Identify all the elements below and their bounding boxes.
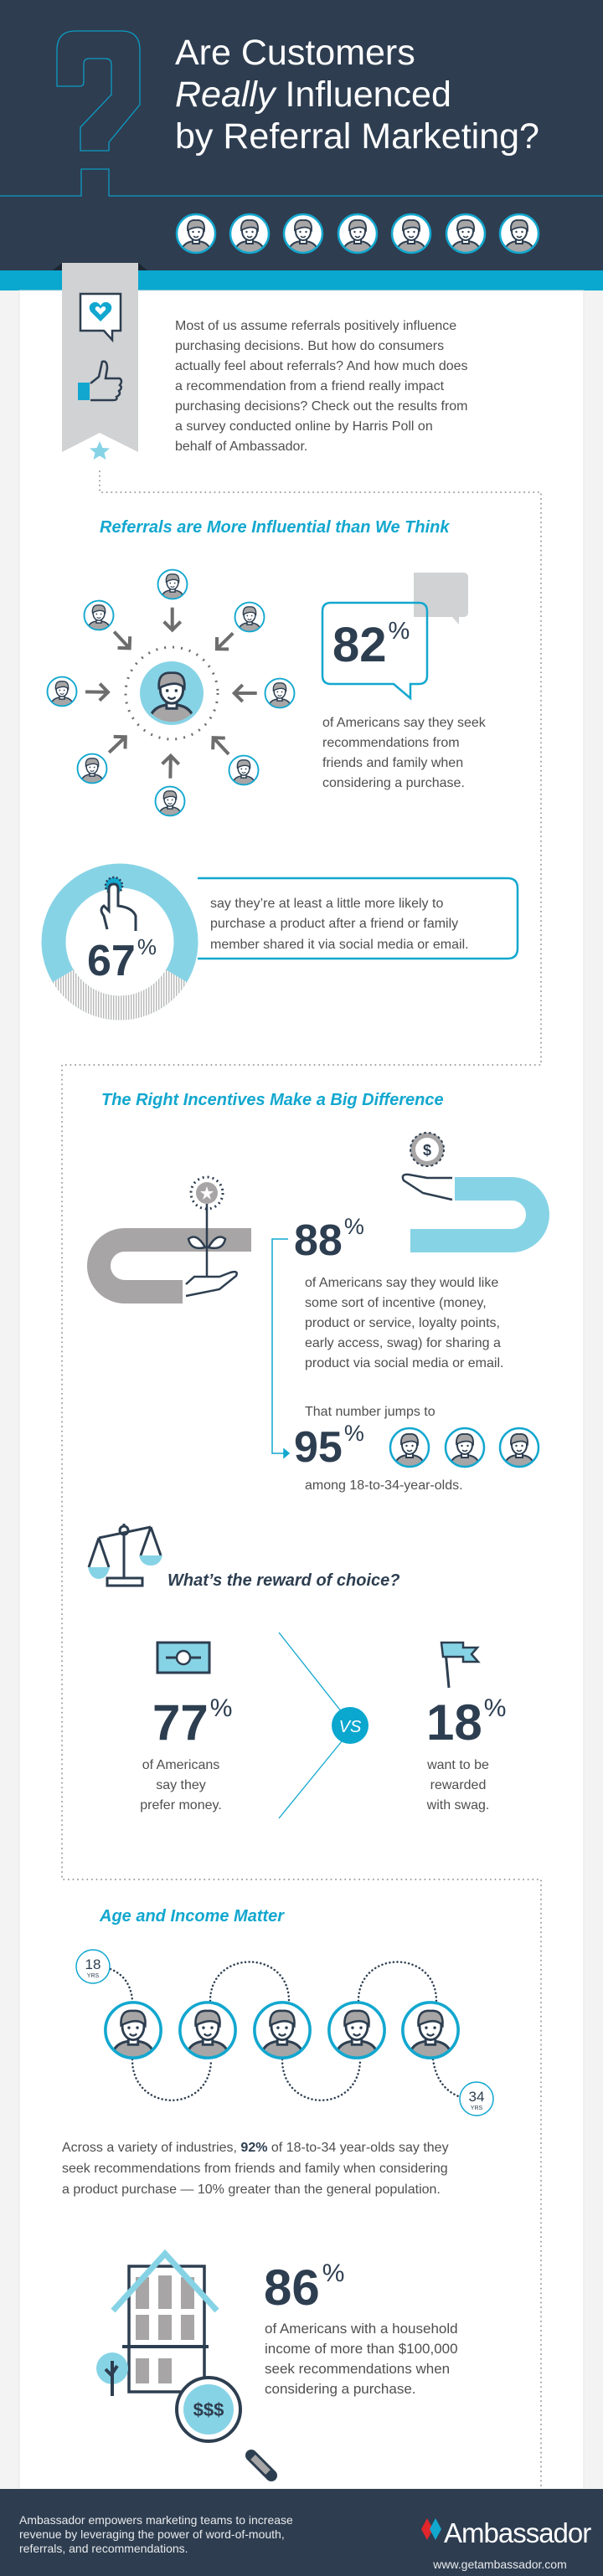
stat: 18%: 18 [426,1694,482,1751]
url: www.getambassador.com [432,2558,567,2571]
text: 88% description [305,1276,503,1419]
text: 88% description: some sort of incentive (money, [305,1296,487,1310]
text: 82% description: friends and family when [322,756,463,770]
ribbon with icons [53,263,147,460]
footer text: Ambassador empowers marketing teams to increase [19,2513,293,2527]
badge: 34 yrs [460,2082,493,2116]
donut chart 67%: 67 [87,937,136,985]
avatar row [177,214,539,255]
stat: 86% [264,2260,458,2397]
stat: 86%: income of more than $100,000 [265,2341,458,2357]
stat: 77%: say they [156,1778,206,1792]
footer text [19,2513,293,2555]
footer text: revenue by leveraging the power of word-of-mouth, [19,2527,285,2541]
text: 82% description: considering a purchase. [322,776,465,790]
donut chart 67%: % [137,934,157,959]
stat: 95%: 95 [294,1423,343,1472]
text: 82% description: of Americans say they seek [322,716,487,730]
icon: chat heart [80,294,121,340]
heading: incentives: The Right Incentives Make a Big Difference [101,1091,444,1109]
title: Really Influenced [175,75,451,115]
stat: 18%: % [484,1694,506,1722]
vs divider: VS [339,1718,362,1736]
intro text: Most of us assume referrals positively influence [175,319,456,333]
stat: 86%: of Americans with a household [265,2321,458,2337]
text: 92% paragraph: a product purchase — 10% greater than the general population. [62,2183,441,2197]
stat: 95%: % [344,1421,364,1446]
stat: 77% [140,1694,232,1812]
stat: 18%: with swag. [426,1798,489,1812]
stat: 18%: rewarded [430,1778,486,1792]
text: 88% description: early access, swag) for sharing a [305,1336,501,1350]
badge: 18 yrs: 18 [85,1956,100,1972]
stat: 88%: 88 [294,1216,343,1265]
icon: thumbs up [78,362,121,400]
intro text [175,319,468,454]
intro text: a survey conducted online by Harris Poll on [175,419,433,434]
callout: 82% [322,573,468,698]
title [175,33,539,157]
text: 82% description: recommendations from [322,736,460,750]
stat: 18% [426,1694,506,1812]
heading: reward of choice: What’s the reward of choice? [168,1571,399,1590]
stat: 77%: 77 [152,1694,209,1751]
text: 92% paragraph: Across a variety of industries, 92% of 18-to-34 year-olds say they [62,2141,449,2155]
stat: 88% [294,1214,364,1265]
heading: age and income: Age and Income Matter [99,1907,285,1926]
text: 92% paragraph: seek recommendations from friends and family when considering [62,2162,448,2176]
title: Are Customers [175,33,415,73]
arrow: bracket connector [272,1239,289,1458]
footer [0,2489,603,2576]
icon: pointer hand [101,877,136,931]
intro text: behalf of Ambassador. [175,440,307,454]
stat: 95% [294,1421,539,1493]
badge: 34 yrs: 34 [469,2089,484,2105]
title: by Referral Marketing? [175,116,539,157]
intro text: actually feel about referrals? And how much does [175,359,468,373]
text: 88% description: product via social media or email. [305,1356,503,1370]
illustration: grey U with plant [99,1177,251,1296]
stat: 86%: considering a purchase. [265,2381,416,2397]
intro text: purchasing decisions. But how do consumers [175,339,444,353]
icon: house with magnifier [96,2254,271,2476]
stat: 77%: % [210,1694,232,1722]
illustration: cyan U with coin hand [403,1133,538,1241]
icon: house with magnifier: $$$ [193,2399,224,2420]
stat: 95%: among 18-to-34-year-olds. [305,1478,463,1493]
callout box: 67%: say they’re at least a little more likely to [210,897,443,911]
callout: 82%: 82 [332,618,387,672]
age timeline [76,1950,493,2116]
stat: 18%: want to be [426,1758,489,1772]
callout: 82%: % [389,618,410,645]
cyan band [0,270,603,291]
vs divider [279,1632,368,1818]
header background [0,0,603,270]
callout box: 67% [198,878,518,959]
hub diagram [48,570,294,818]
stat: 86%: 86 [264,2260,320,2316]
stat: 77%: of Americans [142,1758,219,1772]
stat: 86%: seek recommendations when [265,2361,450,2377]
intro text: purchasing decisions? Check out the results from [175,399,468,414]
icon: flag [441,1643,478,1688]
text: 92% paragraph [62,2141,449,2197]
badge: 34 yrs: YRS [471,2106,483,2111]
callout box: 67%: purchase a product after a friend or family [210,917,458,931]
stat: 88%: % [344,1214,364,1239]
illustration: cyan U with coin hand: $ [423,1142,431,1159]
icon: money bill [157,1643,209,1673]
intro text: a recommendation from a friend really impact [175,379,445,393]
text: 82% description [322,716,487,790]
stat: 77%: prefer money. [140,1798,222,1812]
text: 88% description: product or service, loyalty points, [305,1316,500,1330]
icon: star [90,441,110,460]
icon: scales [88,1524,162,1586]
badge: 18 yrs [76,1950,110,1983]
icon: question mark outline [0,31,603,196]
footer text: referrals, and recommendations. [19,2542,188,2555]
heading: referrals: Referrals are More Influential than We Think [100,518,450,537]
donut chart 67% [54,876,186,1008]
badge: 18 yrs: YRS [87,1973,100,1979]
stat: 86%: % [322,2260,344,2287]
callout box: 67%: member shared it via social media or email. [210,938,469,952]
text: 88% description: of Americans say they would like [305,1276,498,1290]
white content panel [19,291,584,2489]
text: 88% description: That number jumps to [305,1405,436,1419]
logo: Ambassador: Ambassador [444,2517,591,2548]
